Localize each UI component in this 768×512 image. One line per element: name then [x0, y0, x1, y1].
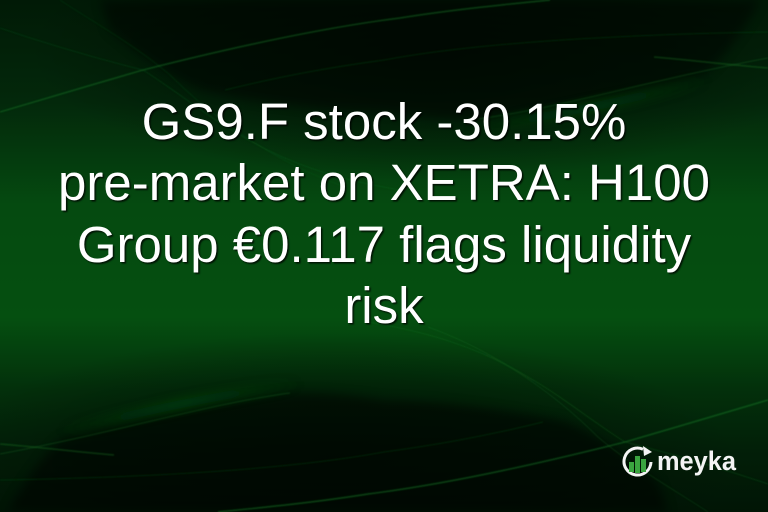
title: risk [344, 277, 424, 334]
title: GS9.F stock -30.15% [142, 93, 626, 150]
logo: meyka [622, 446, 737, 476]
title: Group €0.117 flags liquidity [77, 216, 691, 273]
soft light band along lobe edges [60, 80, 708, 432]
icon: ring with bars [624, 446, 652, 475]
wordmark: meyka [657, 446, 737, 476]
title: pre-market on XETRA: H100 [58, 154, 710, 211]
